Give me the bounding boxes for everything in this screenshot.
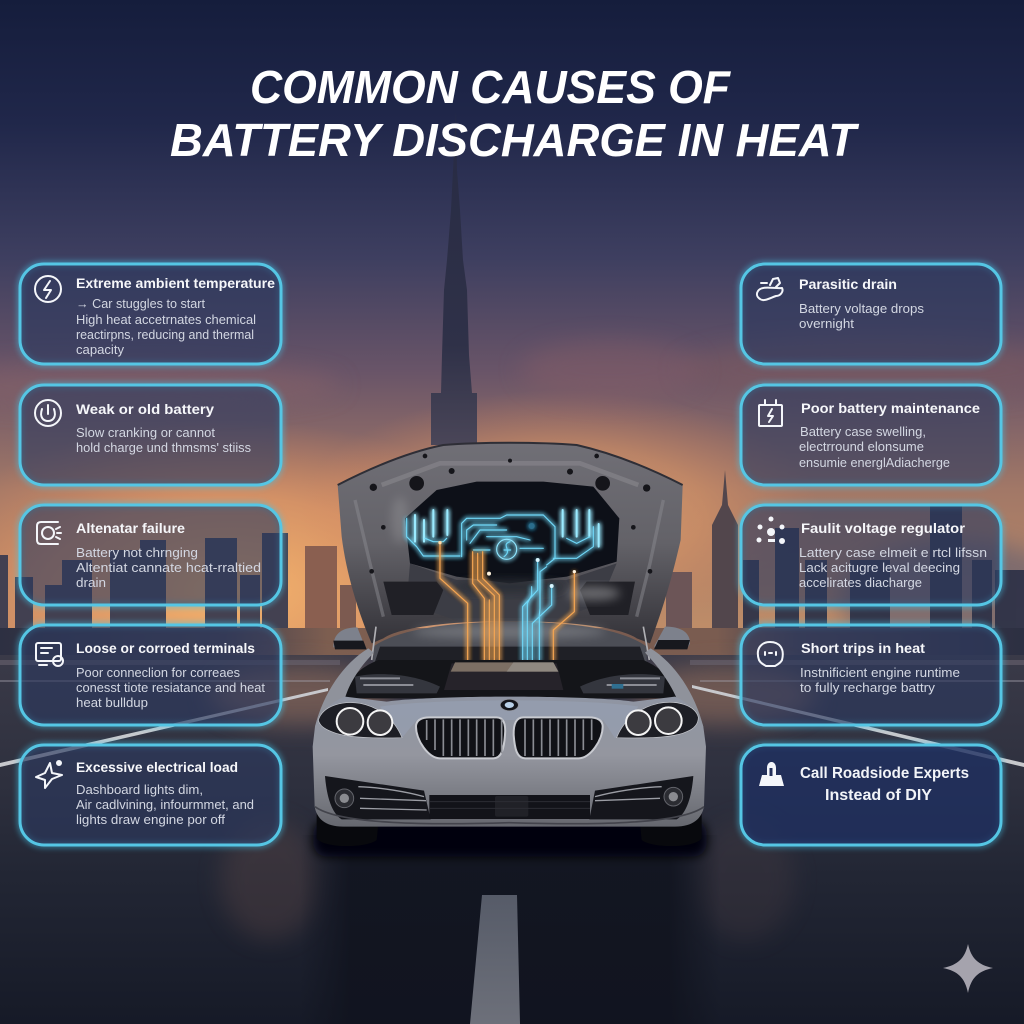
body text: electrround elonsume xyxy=(799,440,924,454)
hood vents xyxy=(383,582,443,615)
heading: Parasitic drain xyxy=(799,276,897,292)
body text xyxy=(76,666,266,710)
body text: to fully recharge battry xyxy=(800,681,936,695)
hood center smoke panel xyxy=(407,563,617,622)
road details xyxy=(0,660,1024,1024)
badge xyxy=(500,699,518,711)
heading: Excessive electrical load xyxy=(76,759,238,775)
body text xyxy=(800,666,960,695)
panel: parasitic drain xyxy=(741,264,1001,364)
call to action text xyxy=(800,765,969,804)
body text xyxy=(76,546,261,590)
body text: → Car stuggles to start xyxy=(76,297,206,311)
icon: terminal monitor xyxy=(36,643,63,666)
bonnet highlight xyxy=(380,700,638,738)
heading: Loose or corroed terminals xyxy=(76,640,255,656)
road surface xyxy=(0,655,1024,1024)
panel: weak or old battery xyxy=(20,385,281,485)
dark glass window xyxy=(405,482,619,583)
body text xyxy=(799,302,924,331)
body text xyxy=(76,426,251,455)
panel: extreme ambient temperature xyxy=(20,264,281,364)
call to action text: Call Roadsiode Experts xyxy=(800,765,969,782)
hood bolts xyxy=(369,454,652,574)
panel: alternator failure xyxy=(20,505,281,605)
car body xyxy=(313,697,706,827)
icon: bolt circle xyxy=(35,276,61,302)
right headlight xyxy=(617,702,698,738)
heading: Faulit voltage regulator xyxy=(801,520,966,536)
ground shadow xyxy=(313,820,707,857)
body text: ensumie energlAdiacherge xyxy=(799,456,950,470)
panel: excessive electrical load xyxy=(20,745,281,845)
icon: spark xyxy=(36,761,62,788)
body text: Lack acitugre leval deecing xyxy=(799,561,960,575)
icon: power circle xyxy=(35,400,61,426)
body text: Air cadlvining, infourmmet, and xyxy=(76,798,254,812)
body text: Battery voltage drops xyxy=(799,302,924,316)
body text: drain xyxy=(76,576,106,590)
kidney grille xyxy=(416,717,603,758)
sunset glow xyxy=(0,340,1024,760)
body text: lights draw engine por off xyxy=(76,813,226,827)
burj tower xyxy=(431,112,477,445)
body text: heat bulldup xyxy=(76,696,148,710)
lower air intakes xyxy=(325,776,693,819)
icon: head gauge xyxy=(758,642,783,666)
body text xyxy=(76,297,256,357)
open hood xyxy=(338,443,683,643)
body text xyxy=(799,546,987,590)
orange heat traces xyxy=(440,543,574,662)
title xyxy=(170,61,860,166)
icon: regulator dots xyxy=(756,516,785,544)
icon: draining hand xyxy=(757,278,783,300)
panel: call roadside experts xyxy=(741,745,1001,845)
panel: short trips in heat xyxy=(741,625,1001,725)
engine bay xyxy=(345,627,677,698)
body text: Battery not chrnging xyxy=(76,546,198,560)
steam xyxy=(413,624,606,639)
body text: overnight xyxy=(799,317,855,331)
panel: loose or corroded terminals xyxy=(20,625,281,725)
cyan circuit top xyxy=(407,510,599,565)
body text: Poor conneclion for correaes xyxy=(76,666,240,680)
fenders xyxy=(315,648,703,727)
body text: accelirates diacharge xyxy=(799,576,922,590)
body text xyxy=(76,783,254,827)
body text xyxy=(799,425,950,470)
title: BATTERY DISCHARGE IN HEAT xyxy=(170,114,860,166)
body text: Dashboard lights dim, xyxy=(76,783,203,797)
icon: battery xyxy=(759,400,782,426)
background sky xyxy=(0,0,1024,680)
body text: conesst tiote resiatance and heat xyxy=(76,681,266,695)
heading: Weak or old battery xyxy=(76,401,214,417)
body text: Battery case swelling, xyxy=(800,425,926,439)
body text: reactirpns, reducing and thermal xyxy=(76,328,254,342)
icon: alternator xyxy=(37,522,61,544)
body text: Altentiat cannate hcat-rraltied xyxy=(76,561,261,575)
title: COMMON CAUSES OF xyxy=(250,61,732,113)
body text: Slow cranking or cannot xyxy=(76,426,216,440)
sparkle watermark xyxy=(943,944,993,993)
glowing circuit diagram xyxy=(407,510,599,662)
panel: poor battery maintenance xyxy=(741,385,1001,485)
body text: High heat accetrnates chemical xyxy=(76,313,256,327)
body text: capacity xyxy=(76,343,125,357)
front tires xyxy=(317,813,702,846)
skyline xyxy=(0,470,1024,658)
icon: download arrow xyxy=(759,762,784,786)
body text: hold charge und thmsms' stiiss xyxy=(76,441,251,455)
call to action text: Instead of DIY xyxy=(825,787,933,804)
body text: Lattery case elmeit e rtcl lifssn xyxy=(799,546,987,560)
left headlight xyxy=(318,703,402,738)
body text: Instnificient engine runtime xyxy=(800,666,960,680)
heading: Short trips in heat xyxy=(801,640,925,656)
heading: Extreme ambient temperature xyxy=(76,275,275,291)
side mirrors xyxy=(333,627,690,649)
panel: faulty voltage regulator xyxy=(741,505,1001,605)
windshield behind hood xyxy=(373,622,647,667)
heading: Poor battery maintenance xyxy=(801,400,980,416)
heading: Altenatar failure xyxy=(76,520,185,536)
car with raised hood xyxy=(313,443,707,857)
blue traces xyxy=(523,560,552,662)
